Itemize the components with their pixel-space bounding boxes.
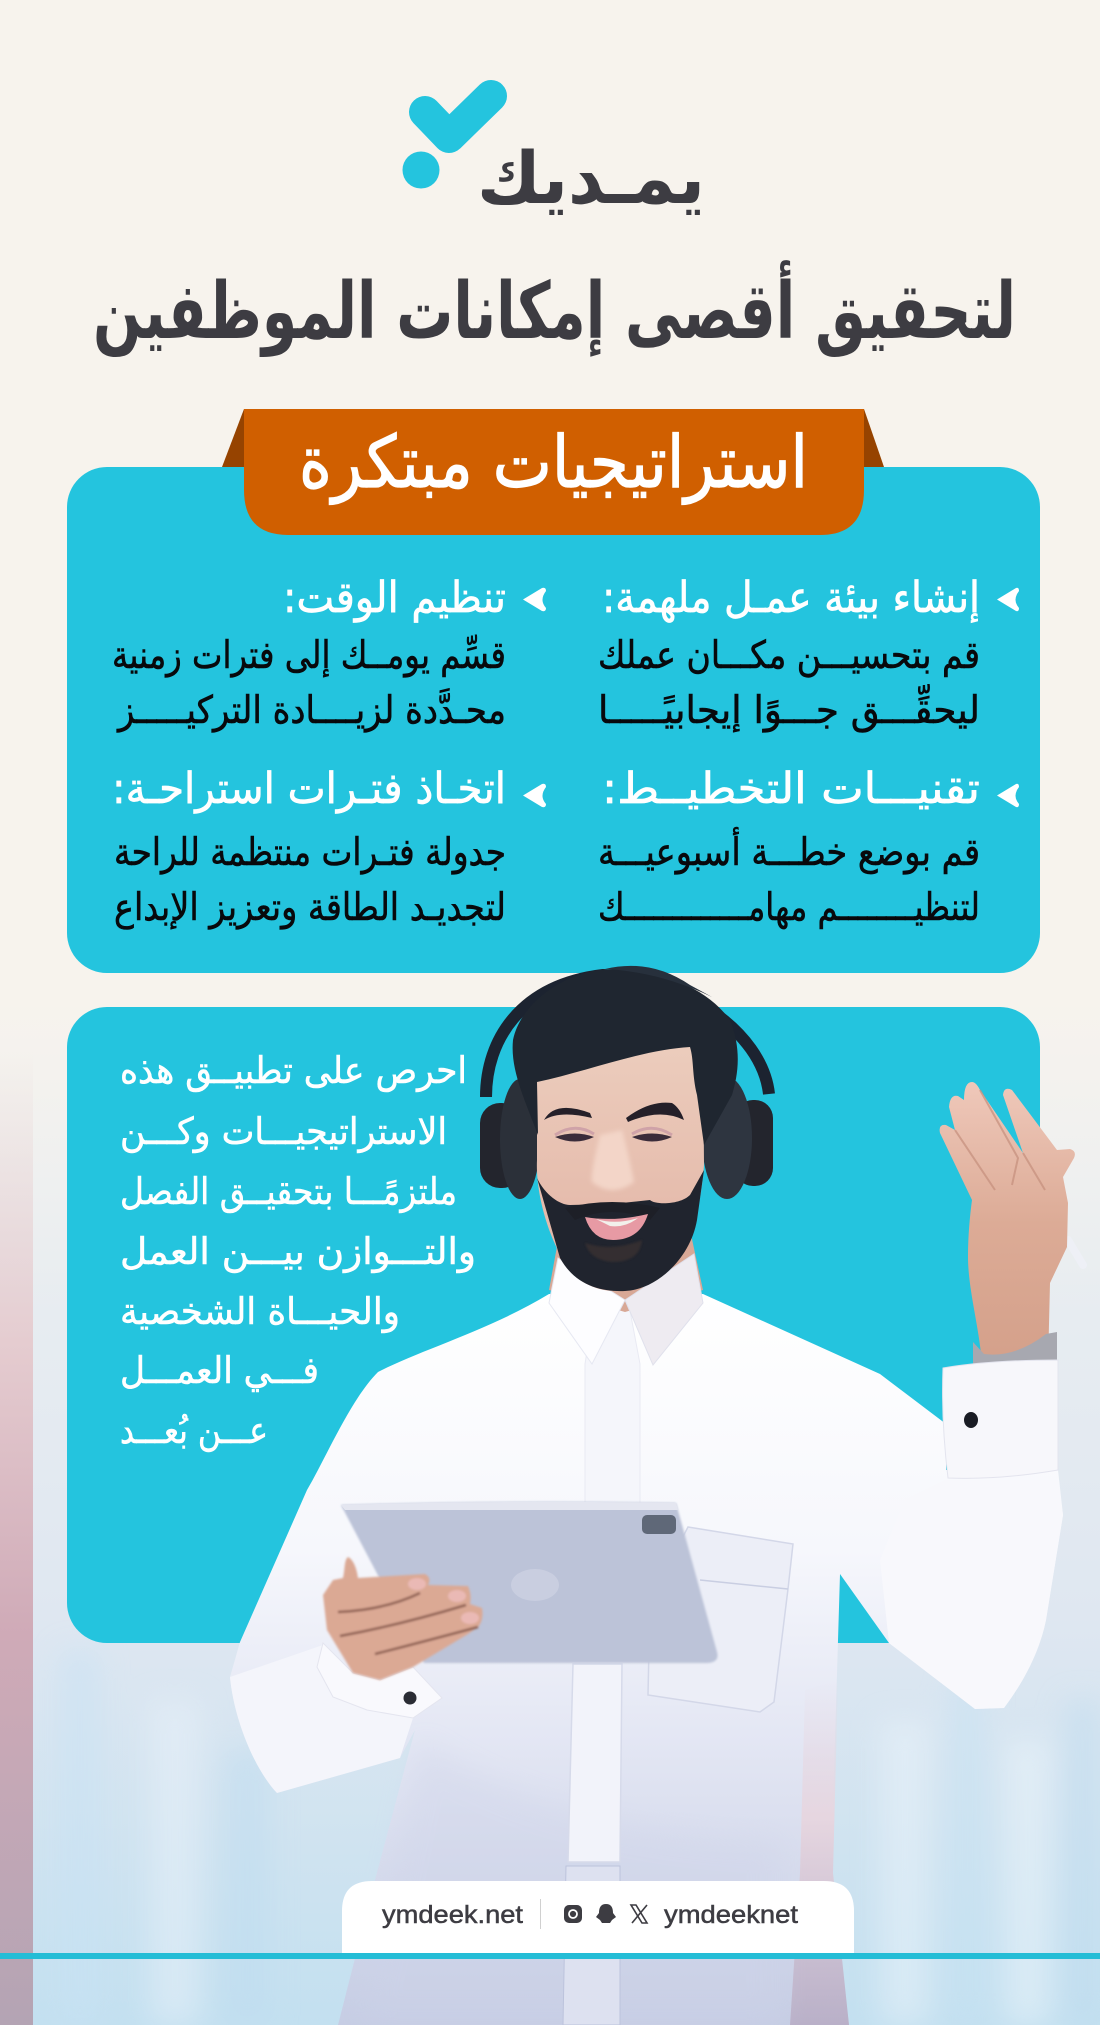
- neck: [549, 1230, 703, 1312]
- footer line: [0, 1953, 1100, 1959]
- item: taking breaks: جدولة فتـرات منتظمة للراحة: [114, 830, 506, 875]
- item: time management: قسِّم يومــك إلى فترات زمنية: [112, 633, 506, 678]
- tablet: [341, 1502, 718, 1663]
- head: beard and face: [537, 1040, 704, 1291]
- item: taking breaks: اتخـاذ فتـرات استراحـة:: [112, 764, 506, 814]
- item: planning techniques: تقنيـــات التخطيــط:: [602, 764, 980, 814]
- item: planning techniques: لتنظيــــــــم مهامـــــــــــــك: [598, 885, 980, 930]
- watch: [973, 1332, 1057, 1364]
- headphone cups and band: [480, 975, 773, 1199]
- closing text: احرص على تطبيــق هذه: [120, 1049, 467, 1092]
- item: planning techniques: قم بوضع خطـــة أسبوعيـــة: [598, 827, 980, 875]
- logo: [402, 96, 705, 220]
- raised hand: [940, 1082, 1083, 1365]
- closing text: والتـــوازن بيـــن العمل: [120, 1230, 476, 1273]
- item: inspiring work environment: [598, 573, 1019, 733]
- item: time management: تنظيم الوقت:: [283, 573, 506, 623]
- panel: closing message: [67, 1007, 1040, 1643]
- icon: instagram: [564, 1905, 582, 1923]
- placket: [568, 1664, 622, 1862]
- eyebrows: [544, 1108, 592, 1120]
- person with headphones and tablet: [230, 966, 1083, 2025]
- panel: strategies: [67, 409, 1040, 973]
- thobe: [230, 1294, 1063, 2025]
- nose: [592, 1130, 634, 1190]
- logo wordmark: يمـديك: [477, 136, 705, 220]
- chin shading: [585, 1240, 642, 1262]
- left sleeve: [230, 1645, 413, 1793]
- icon: snapchat: [596, 1904, 616, 1923]
- closing text: الاستراتيجيـــات وكـــن: [120, 1110, 447, 1153]
- item: time management: محـدَّدة لزيــــادة التركيـــــز: [116, 688, 506, 733]
- heading: innovative strategies: استراتيجيات مبتكرة: [299, 420, 808, 505]
- cuff: [943, 1360, 1058, 1478]
- item: time management: [112, 573, 546, 733]
- pen: [1068, 1240, 1083, 1265]
- left cuff: [317, 1643, 442, 1718]
- item: inspiring work environment: إنشاء بيئة عمـل ملهمة:: [602, 573, 980, 623]
- tablet hand: [323, 1557, 482, 1680]
- closing text: ملتزمًـــا بتحقيــق الفصل: [120, 1170, 457, 1213]
- website: ymdeek.net: [382, 1901, 523, 1929]
- ribbon: heading tab: [222, 409, 884, 535]
- item: taking breaks: لتجديـد الطاقة وتعزيز الإبداع: [114, 885, 506, 930]
- right sleeve: [880, 1480, 1063, 1709]
- item: planning techniques: [598, 764, 1019, 930]
- closing text: عـــن بُعـــد: [120, 1409, 268, 1452]
- closing text: [120, 1049, 476, 1452]
- icon: x: [631, 1905, 647, 1923]
- eyes: [555, 1134, 594, 1142]
- pocket: [648, 1527, 793, 1712]
- item: inspiring work environment: ليحقِّـــق جـــوًا إيجابيًـــــا: [598, 684, 980, 733]
- hair: [513, 969, 738, 1145]
- item: taking breaks: [112, 764, 546, 930]
- item: inspiring work environment: قم بتحسيـــن مكـــان عملك: [598, 633, 980, 678]
- closing text: والحيـــاة الشخصية: [120, 1290, 400, 1333]
- collar: [549, 1254, 703, 1365]
- mouth: [585, 1214, 648, 1240]
- closing text: فـــي العمـــل: [120, 1349, 319, 1392]
- handle: ymdeeknet: [664, 1901, 798, 1929]
- footer bar: [342, 1881, 854, 1953]
- icon: check mark: [402, 96, 491, 188]
- beard: [537, 1170, 704, 1291]
